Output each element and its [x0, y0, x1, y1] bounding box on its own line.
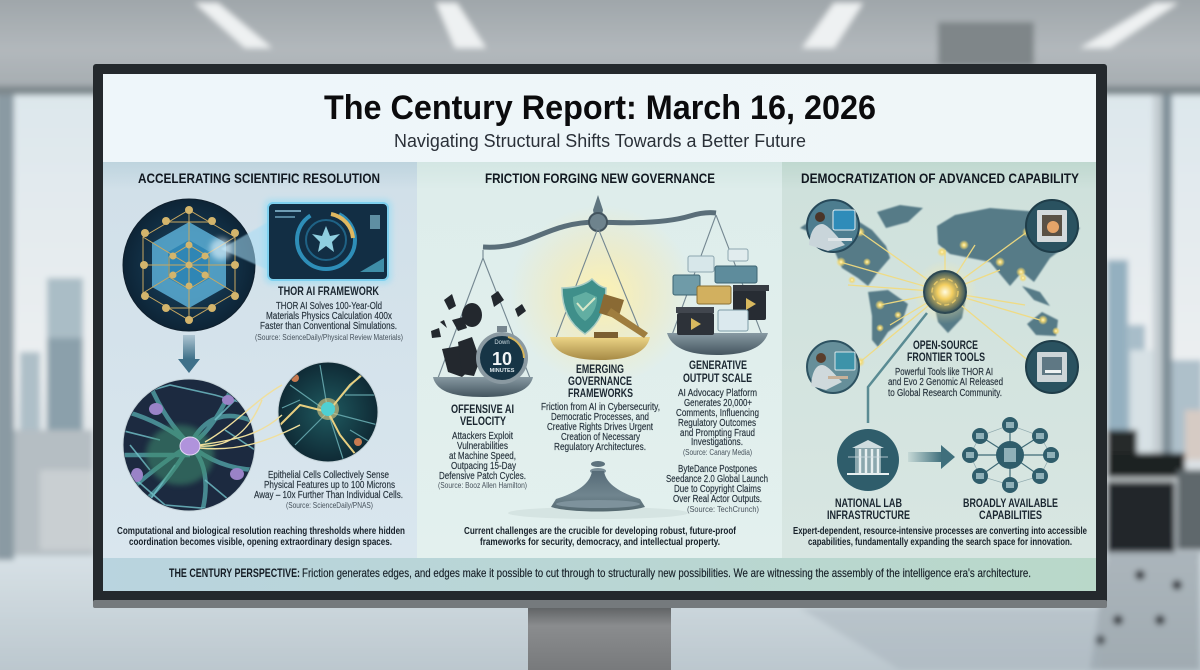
right text block: (Source: Canary Media) [683, 448, 752, 457]
open-source text block: OPEN-SOURCE [913, 340, 978, 352]
right text block: GENERATIVE [689, 360, 747, 372]
icon: THOR AI dashboard [264, 199, 392, 284]
heading: ACCELERATING SCIENTIFIC RESOLUTION [138, 170, 380, 186]
right text block: OUTPUT SCALE [683, 373, 752, 385]
panel summary [793, 525, 1087, 548]
centre text block: EMERGING [576, 364, 624, 376]
signal lightning [200, 385, 300, 449]
icon: balance scale beam [438, 195, 762, 378]
panel summary: Expert-dependent, resource-intensive processes are converting into accessible [793, 525, 1087, 537]
icon: stopwatch 10 minutes [476, 326, 528, 384]
left text block: Outpacing 15-Day [451, 461, 516, 472]
right text block [666, 360, 768, 514]
icon: cell network large [122, 378, 256, 512]
connector: hub to national lab [868, 313, 927, 423]
panel: accelerating scientific resolution [103, 162, 417, 558]
capabilities label [963, 498, 1058, 522]
open-source text block: FRONTIER TOOLS [907, 352, 985, 364]
map nodes [836, 227, 1060, 367]
left text block: (Source: Booz Allen Hamilton) [438, 481, 527, 490]
title: The Century Report: March 16, 2026 [324, 89, 876, 127]
national lab label: NATIONAL LAB [835, 498, 902, 510]
centre text block: Creation of Necessary [561, 432, 640, 443]
icon: stopwatch 10 minutes: MINUTES [490, 368, 515, 374]
right text block: Generates 20,000+ [684, 398, 752, 409]
monitor [93, 64, 1107, 608]
panel: democratization of advanced capability [782, 162, 1096, 558]
thor text block: Materials Physics Calculation 400x [266, 311, 392, 322]
national lab label: INFRASTRUCTURE [827, 510, 910, 522]
centre text block: Regulatory Architectures. [554, 442, 646, 453]
capabilities label: BROADLY AVAILABLE [963, 498, 1058, 510]
icon: stopwatch 10 minutes: 10 [492, 349, 512, 369]
subtitle: Navigating Structural Shifts Towards a Better Future [394, 131, 806, 151]
panel summary: coordination becomes visible, opening extraordinary design spaces. [129, 536, 392, 548]
right pan: generative output [667, 249, 769, 355]
icon: open-source hub [913, 260, 977, 324]
icon: researcher at computer top [807, 200, 859, 252]
open-source text block: and Evo 2 Genomic AI Released [888, 377, 1003, 388]
panel summary: Current challenges are the crucible for developing robust, future-proof [464, 525, 736, 537]
centre text block: FRAMEWORKS [568, 388, 633, 400]
panel summary: frameworks for security, democracy, and intellectual property. [480, 536, 720, 548]
open-source text block: Powerful Tools like THOR AI [895, 367, 993, 378]
centre text block: Friction from AI in Cybersecurity, [541, 402, 660, 413]
capabilities label: CAPABILITIES [979, 510, 1042, 522]
icon: scale base [508, 461, 688, 519]
heading: DEMOCRATIZATION OF ADVANCED CAPABILITY [801, 170, 1080, 186]
icon: stopwatch 10 minutes: Down [494, 340, 510, 346]
epithelial text block: (Source: ScienceDaily/PNAS) [286, 501, 373, 510]
right text block: (Source: TechCrunch) [687, 505, 759, 514]
panel: friction forging new governance [417, 162, 782, 558]
left text block: Vulnerabilities [457, 441, 508, 452]
thor text block: THOR AI Solves 100-Year-Old [276, 301, 382, 312]
epithelial text block: Away – 10x Further Than Individual Cells. [254, 490, 403, 501]
panel summary: capabilities, fundamentally expanding the search space for innovation. [808, 536, 1072, 548]
icon: 3D printer top [1026, 200, 1078, 252]
thor text block [255, 286, 403, 342]
right text block: Investigations. [691, 437, 743, 448]
thor text block: THOR AI FRAMEWORK [278, 286, 380, 298]
panel summary [464, 525, 736, 548]
right text block: Over Real Actor Outputs. [673, 494, 762, 505]
epithelial text block [254, 470, 403, 510]
centre text block: GOVERNANCE [568, 376, 632, 388]
monitor stand [528, 606, 671, 670]
epithelial text block: Epithelial Cells Collectively Sense [268, 470, 389, 481]
right text block: and Prompting Fraud [680, 428, 755, 439]
right text block: ByteDance Postpones [678, 464, 757, 475]
left text block: OFFENSIVE AI [451, 404, 514, 416]
connection rays [840, 232, 1040, 362]
arrow: lattice to cells [178, 335, 200, 373]
left text block: Defensive Patch Cycles. [439, 471, 526, 482]
world map [800, 205, 1080, 347]
open-source text block: to Global Research Community. [888, 388, 1002, 399]
right text block: Due to Copyright Claims [674, 484, 761, 495]
heading: FRICTION FORGING NEW GOVERNANCE [485, 170, 715, 186]
centre text block: Democratic Processes, and [551, 412, 649, 423]
century perspective banner: Friction generates edges, and edges make it possible to cut through to structurally new possibilities. We are witnessing the assembly of the intelligence era's architecture. [302, 566, 1031, 580]
century perspective banner [103, 558, 1096, 591]
icon: 3D printer lower [1026, 341, 1078, 393]
centre text block [541, 364, 660, 453]
thor text block: (Source: ScienceDaily/Physical Review Materials) [255, 333, 403, 342]
centre text block: Creative Rights Drives Urgent [547, 422, 653, 433]
arrow: lab to capabilities [908, 445, 955, 469]
centre pan: shield and gavel [550, 279, 650, 360]
glow [510, 205, 694, 385]
icon: national lab [837, 429, 899, 491]
right text block: Seedance 2.0 Global Launch [666, 474, 768, 485]
icon: crystal lattice [123, 199, 268, 331]
left text block: Attackers Exploit [452, 431, 513, 442]
icon: researcher at computer lower [807, 341, 859, 393]
century perspective banner: THE CENTURY PERSPECTIVE: [169, 566, 300, 580]
left pan: offensive AI velocity [431, 291, 533, 397]
open-source text block [888, 340, 1003, 399]
national lab label [827, 498, 910, 522]
epithelial text block: Physical Features up to 100 Microns [264, 480, 395, 491]
thor text block: Faster than Conventional Simulations. [260, 321, 397, 332]
right text block: Regulatory Outcomes [678, 418, 756, 429]
icon: capability network [962, 417, 1059, 493]
panel summary: Computational and biological resolution reaching thresholds where hidden [117, 525, 405, 537]
right text block: Comments, Influencing [676, 408, 759, 419]
panel summary [117, 525, 405, 548]
left text block: VELOCITY [460, 416, 506, 428]
right text block: AI Advocacy Platform [678, 388, 757, 399]
left text block [438, 404, 527, 490]
icon: cell network small [278, 362, 378, 465]
left text block: at Machine Speed, [449, 451, 516, 462]
